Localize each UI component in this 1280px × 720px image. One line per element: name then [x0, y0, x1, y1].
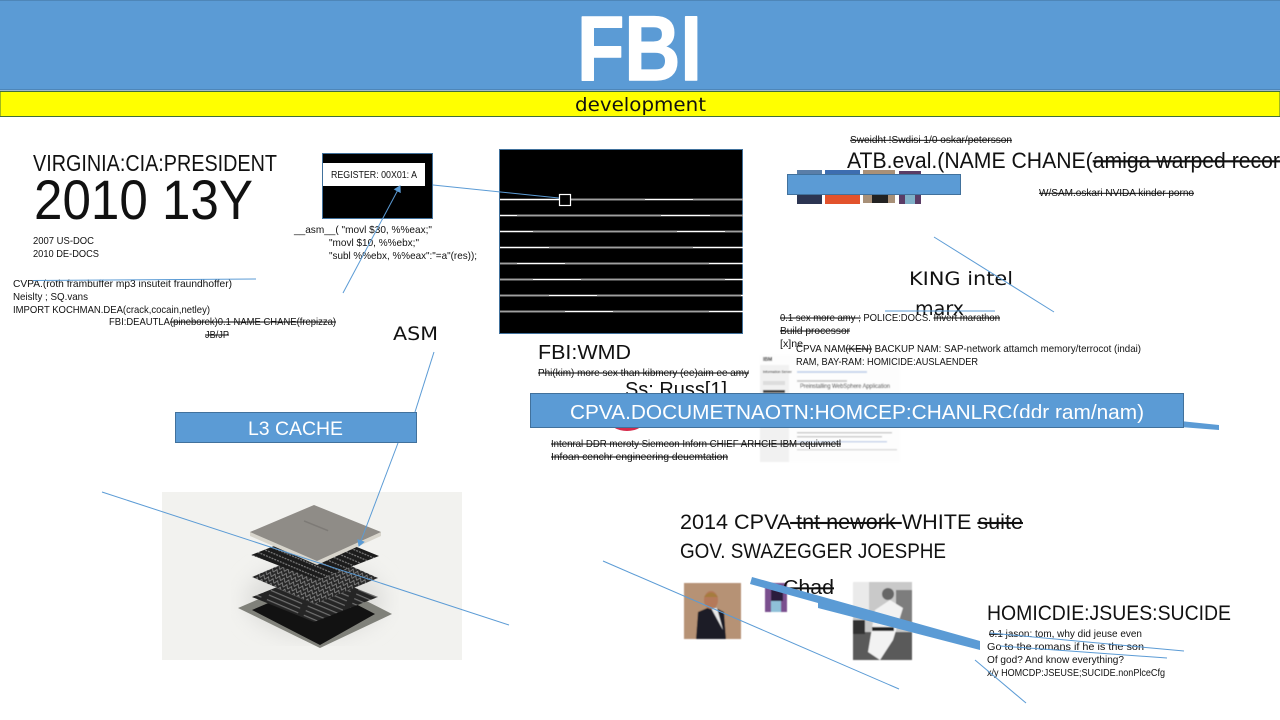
label: ASM: ASM: [393, 323, 438, 345]
header banner: [0, 0, 1280, 100]
code block: asm: "subl %%ebx, %%eax":"=a"(res));: [329, 250, 477, 262]
heading block: Virginia: 2010 13Y: [34, 168, 253, 231]
heading: homicide: HOMICDIE:JSUES:SUCIDE: [987, 602, 1231, 625]
text block: CVPA imports: IMPORT KOCHMAN.DEA(crack,cocain,netley): [13, 304, 210, 316]
text block: internal DDR: [551, 438, 841, 463]
blue wedge: [1180, 421, 1219, 430]
screenshot: documentation page: [760, 355, 900, 462]
text block: jason: [987, 629, 1165, 679]
text block: CVPA imports: FBI:DEAUTLA(pineborek)0.1 NAME CHANE(frepizza): [109, 316, 336, 328]
portrait row with cover bar: [788, 170, 960, 204]
red shape under bar: [609, 409, 645, 431]
screenshot: documentation page: Preinstalling WebSphere Application: [800, 384, 890, 390]
arrow: L3 cache to chip: [359, 443, 398, 546]
heading block: Virginia: 2007 US-DOC: [33, 235, 94, 247]
thick connector: [750, 577, 980, 650]
label: Ss Russ: Ss: Russ[1]: [625, 379, 727, 401]
heading: 2014 CPVA: GOV. SWAZEGGER JOESPHE: [680, 540, 946, 563]
heading block: Virginia: [33, 150, 277, 260]
text block: jason: 0.1 jason: tom, why did jeuse even: [989, 629, 1142, 640]
heading: 2014 CPVA: 2014 CPVA tnt nework WHITE suite: [680, 511, 1023, 534]
register box: REGISTER: 00X01: A: [331, 170, 417, 181]
photo: black and white figure: [853, 582, 912, 660]
connectors: lower right strokes: [975, 633, 1184, 703]
label: Chad: Chad: [783, 577, 834, 599]
box: L3 cache: [176, 412, 416, 442]
heading: ATB eval: ATB.eval.(NAME CHANE(amiga warped recor: [847, 148, 1280, 173]
banner: CPVA documentation: [530, 394, 1184, 428]
text block: police docs: [x]ne: [780, 338, 803, 350]
memory cell marker: [560, 194, 570, 206]
label: KING intel marx: [885, 268, 1013, 320]
text block: police docs: Build processor: [780, 325, 850, 337]
heading: 2014 CPVA: [680, 511, 1023, 563]
text block: CVPA imports: [13, 278, 336, 341]
box: L3 cache: L3 CACHE: [248, 419, 343, 440]
subtitle: development: [575, 94, 706, 116]
code block: asm: [293, 224, 477, 262]
subtitle bar: [0, 92, 1280, 116]
text block: CVPA imports: Neislty ; SQ.vans: [13, 291, 88, 303]
code block: asm: __asm__( "movl $30, %%eax;": [293, 224, 432, 236]
text block: jason: x/y HOMCDP:JSEUSE;SUCIDE.nonPlceCfg: [987, 668, 1165, 679]
text: W/SAM: W/SAM.oskari NVIDA kinder porno: [1039, 188, 1194, 199]
heading: FBI WMD: [538, 342, 750, 379]
banner: CPVA documentation: CPVA.DOCUMETNAOTN:HOMCEP:CHANLRC(ddr ram/nam): [570, 402, 1144, 424]
title: FBI: [577, 0, 702, 100]
photo: man in suit: [684, 583, 741, 639]
connector: register to memory cell: [433, 185, 559, 198]
screenshot: documentation page: Information Server: [763, 370, 793, 374]
top-right text: Swedish line: Sweidht !Swdisi 1/0 oskar/petersson: [850, 135, 1012, 146]
connector: ASM to L3 cache: [415, 352, 434, 412]
text block: internal DDR: Infoan cenchr engineering deuemtation: [551, 451, 728, 463]
label: KING intel marx: KING intel: [909, 268, 1013, 290]
text block: CPVA NAM: [796, 343, 1141, 368]
heading block: Virginia: 2010 DE-DOCS: [33, 248, 99, 260]
screenshot: documentation page: IBM: [763, 357, 772, 363]
text block: CPVA NAM: CPVA NAM(KEN) BACKUP NAM: SAP-network attamch memory/terrocot (indai): [796, 343, 1141, 355]
heading block: Virginia: VIRGINIA:CIA:PRESIDENT: [33, 150, 277, 176]
text block: police docs: 0.1 sex more amy ; POLICE:DOCS. Invert marathon: [780, 312, 1000, 324]
connector: long diagonal lower: [603, 561, 899, 689]
connector: long diagonal across chip: [102, 492, 509, 625]
code block: asm: "movl $10, %%ebx;": [329, 237, 419, 249]
text block: police docs: [780, 312, 1000, 350]
connector: diagonal upper right: [934, 237, 1054, 312]
text block: jason: Go to the romans if he is the son: [987, 642, 1144, 653]
label: KING intel marx: marx: [915, 298, 964, 320]
text block: CVPA imports: JB/JP: [205, 329, 229, 341]
heading: FBI WMD: Phi(kim) more sex than kibmery (ee)aim ee amy: [538, 367, 750, 379]
text block: CVPA imports: CVPA.(roth frambuffer mp3 insuteit fraundhoffer): [13, 278, 232, 290]
photo: small figure: [765, 583, 787, 612]
heading: FBI WMD: FBI:WMD: [538, 342, 631, 364]
text block: internal DDR: Intenral DDR meroty Siemeon Inforn CHIEF ARHCIE IBM equivmetl: [551, 438, 841, 450]
text block: jason: Of god? And know everything?: [987, 655, 1124, 666]
memory panel: [500, 150, 743, 334]
arrow: ASM to register: [343, 186, 400, 293]
image: exploded chip: [162, 492, 462, 660]
text block: CPVA NAM: RAM, BAY-RAM: HOMICIDE:AUSLAENDER: [796, 356, 978, 368]
register box: [322, 154, 432, 218]
